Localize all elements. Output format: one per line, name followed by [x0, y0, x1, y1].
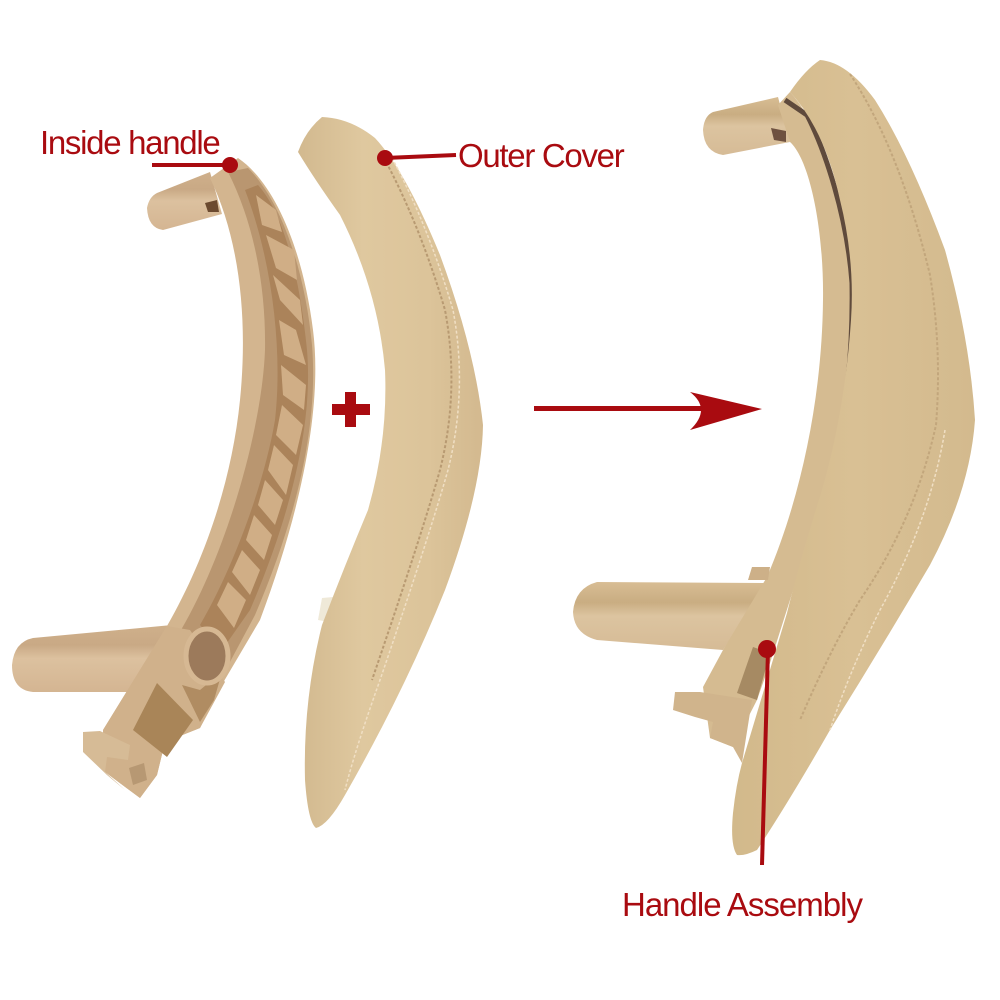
ribbed back structure [200, 185, 308, 650]
cover body [732, 60, 975, 855]
lower mounting post [573, 582, 767, 650]
label: handle assembly: Handle Assembly [622, 886, 863, 923]
ridge band [175, 168, 313, 690]
handle body [103, 158, 315, 798]
upper mounting post [147, 172, 222, 230]
lower mounting post [12, 625, 172, 692]
label: inside handle [40, 124, 238, 173]
handle assembly [573, 60, 975, 855]
dark gap [785, 100, 852, 455]
bracket clips [673, 692, 752, 763]
upper mounting post [703, 97, 790, 155]
bracket openings [133, 683, 193, 757]
ribs [217, 195, 306, 628]
inner frame strip [703, 92, 854, 747]
label: handle assembly [622, 640, 863, 923]
plus sign [332, 392, 370, 427]
clip tabs [318, 596, 345, 624]
inside handle part [12, 158, 315, 798]
cover body [298, 117, 483, 828]
arrow [534, 392, 762, 430]
bottom clip [83, 731, 130, 790]
stitching [800, 74, 938, 720]
round latch [186, 629, 228, 683]
bottom bracket [103, 626, 225, 798]
stitching [372, 158, 451, 680]
label: outer cover [377, 137, 625, 174]
label: outer cover: Outer Cover [458, 137, 625, 174]
label: inside handle: Inside handle [40, 124, 219, 161]
outer cover part [298, 117, 483, 828]
